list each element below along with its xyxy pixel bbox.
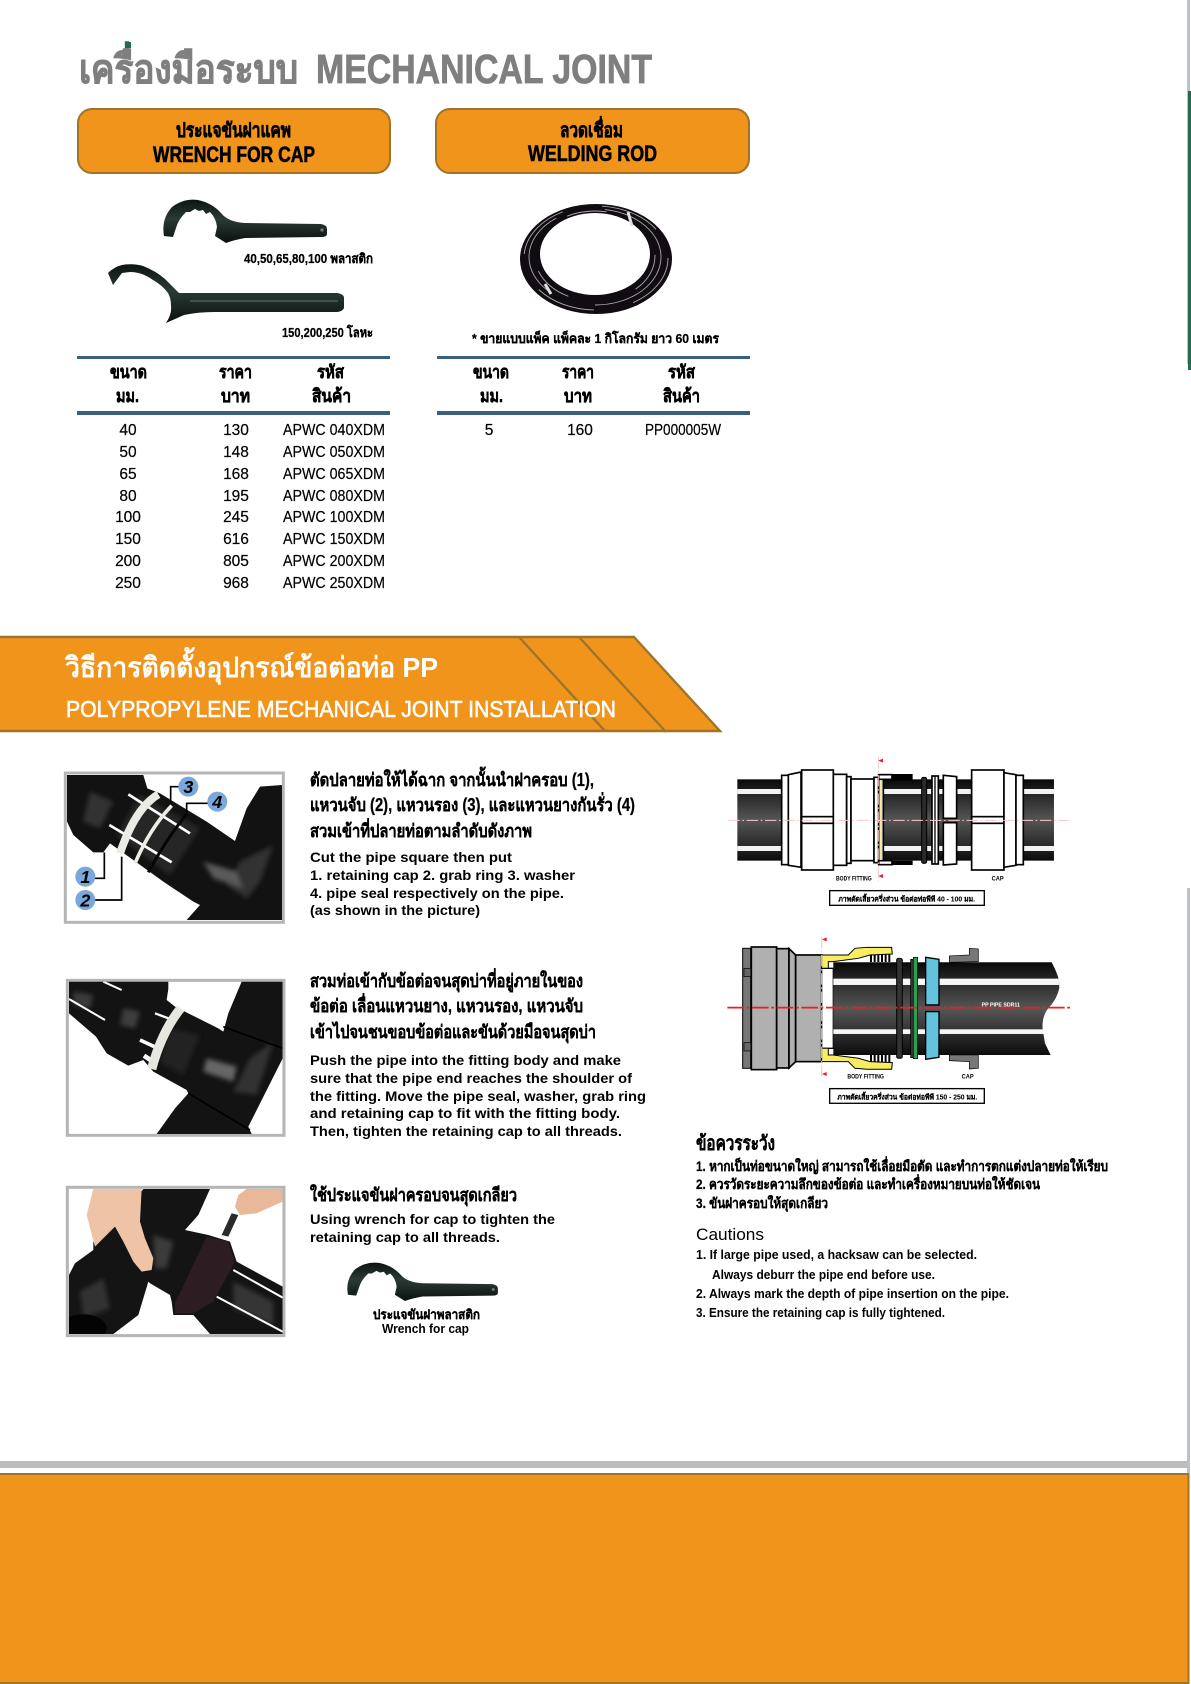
text: step 1: แหวนจับ (2), แหวนรอง (3), และแหวนยางกันรั่ว (4): [310, 792, 635, 815]
section banner: installation: วิธีการติดตั้งอุปกรณ์ข้อต่อท่อ PP: [64, 646, 438, 685]
text: precautions: ข้อควรระวัง: [696, 1132, 775, 1155]
icon: welding rod coil: [520, 204, 672, 314]
footer orange panel: [0, 1474, 1188, 1683]
table: wrench prices: รหัส: [317, 362, 345, 382]
panel heading: wrench for cap: [78, 109, 390, 173]
text: precautions: 3. ขันฝาครอบให้สุดเกลียว: [696, 1194, 828, 1212]
panel heading: welding rod: [436, 109, 749, 173]
table: wrench prices: APWC 040XDM: [283, 422, 385, 439]
table: welding rod price: ขนาด: [473, 362, 509, 382]
text: precautions: Always deburr the pipe end before use.: [712, 1267, 935, 1282]
table: wrench prices: 65: [119, 466, 137, 483]
text: precautions: 2. Always mark the depth of pipe insertion on the pipe.: [696, 1286, 1009, 1301]
callout lines and number badges: 4: [211, 792, 222, 812]
diagram: section view 40-100 mm: [728, 757, 1069, 905]
text: precautions: 1. If large pipe used, a hacksaw can be selected.: [696, 1247, 977, 1262]
caption: large size section: [830, 1089, 984, 1103]
table: wrench prices: APWC 050XDM: [283, 444, 385, 461]
text: step 1: [310, 766, 635, 918]
panel heading: wrench for cap: WRENCH FOR CAP: [153, 142, 315, 167]
label: metal wrench sizes: 150,200,250 โลหะ: [282, 324, 373, 340]
table: wrench prices: [77, 356, 390, 592]
photo: step 1 parts on pipe: [65, 773, 283, 922]
icon: metal wrench: [108, 264, 344, 323]
text: precautions: 2. ควรวัดระยะความลึกของข้อต่อ และทำเครื่องหมายบนท่อให้ชัดเจน: [696, 1174, 1040, 1192]
diagram: section view 150-250 mm: CAP: [962, 1075, 974, 1081]
callout lines and number badges: 2: [79, 890, 90, 910]
text: step 3: Using wrench for cap to tighten the: [310, 1212, 556, 1227]
text: precautions: 1. หากเป็นท่อขนาดใหญ่ สามารถใช้เลื่อยมือตัด และทำการตกแต่งปลายท่อให้เรียบ: [696, 1156, 1108, 1175]
photo: step 2 pipe pushed into fitting: [67, 980, 284, 1135]
table: wrench prices: มม.: [116, 386, 139, 406]
caption: small size section: ภาพตัดเสี้ยวครึ่งส่วน ข้อต่อท่อพีพี 40 - 100 มม.: [838, 892, 975, 903]
section banner: installation: [0, 637, 720, 732]
text: step 2: Then, tighten the retaining cap to all threads.: [310, 1124, 622, 1139]
text: step 2: เข้าไปจนชนขอบข้อต่อและขันด้วยมือจนสุดบ่า: [310, 1021, 596, 1044]
table: wrench prices: APWC 200XDM: [283, 553, 385, 570]
table: welding rod price: ราคา: [562, 362, 594, 382]
caption: small wrench: [373, 1307, 480, 1336]
text: step 1: ตัดปลายท่อให้ได้ฉาก จากนั้นนำฝาครอบ (1),: [310, 766, 594, 790]
table: wrench prices: 968: [223, 575, 249, 592]
title: เครื่องมือระบบ: [79, 41, 298, 92]
table: wrench prices: 805: [223, 553, 249, 570]
table: wrench prices: 195: [223, 488, 249, 505]
table: welding rod price: สินค้า: [663, 386, 700, 406]
panel heading: welding rod: ลวดเชื่อม: [560, 115, 623, 142]
caption: large size section: ภาพตัดเสี้ยวครึ่งส่วน ข้อต่อท่อพีพี 150 - 250 มม.: [837, 1090, 977, 1101]
panel heading: wrench for cap: ประแจขันฝาแคพ: [176, 120, 291, 142]
note: welding rod packaging: * ขายแบบแพ็ค แพ็คละ 1 กิโลกรัม ยาว 60 เมตร: [472, 329, 719, 346]
photo: step 3 tightening with wrench: [60, 1187, 284, 1342]
table: welding rod price: 5: [485, 422, 493, 439]
right edge strips: [1187, 0, 1191, 1473]
text: step 2: sure that the pipe end reaches the shoulder of: [310, 1071, 633, 1086]
text: step 3: [310, 1184, 556, 1245]
callout lines and number badges: [75, 777, 227, 910]
panel heading: welding rod: WELDING ROD: [528, 141, 657, 166]
text: precautions: [696, 1132, 1108, 1320]
text: step 2: and retaining cap to fit with the fitting body.: [310, 1106, 620, 1121]
table: wrench prices: 80: [119, 488, 137, 505]
diagram: section view 40-100 mm: CAP: [992, 877, 1004, 883]
footer divider: [0, 1461, 1188, 1468]
table: wrench prices: 200: [115, 553, 141, 570]
table: wrench prices: APWC 250XDM: [283, 575, 385, 592]
callout lines and number badges: 3: [183, 777, 193, 797]
table: welding rod price: บาท: [564, 386, 592, 406]
text: step 1: 4. pipe seal respectively on the pipe.: [310, 886, 564, 901]
text: step 1: 1. retaining cap 2. grab ring 3. washer: [310, 868, 576, 883]
text: step 2: [310, 968, 646, 1139]
table: wrench prices: 130: [223, 422, 249, 439]
table: wrench prices: APWC 150XDM: [283, 531, 385, 548]
table: wrench prices: APWC 100XDM: [283, 509, 385, 526]
icon: plastic wrench: [163, 200, 327, 243]
text: step 2: Push the pipe into the fitting body and make: [310, 1053, 622, 1068]
text: step 1: Cut the pipe square then put: [310, 850, 513, 865]
table: wrench prices: 168: [223, 466, 249, 483]
caption: small wrench: ประแจขันฝาพลาสติก: [373, 1307, 480, 1322]
table: welding rod price: 160: [567, 422, 593, 439]
callout lines and number badges: 1: [80, 867, 90, 887]
table: wrench prices: APWC 065XDM: [283, 466, 385, 483]
table: wrench prices: บาท: [221, 386, 250, 406]
table: wrench prices: 245: [223, 509, 249, 526]
table: wrench prices: ขนาด: [110, 362, 147, 382]
table: wrench prices: APWC 080XDM: [283, 488, 385, 505]
text: precautions: 3. Ensure the retaining cap is fully tightened.: [696, 1305, 945, 1320]
table: welding rod price: PP000005W: [645, 422, 721, 439]
table: wrench prices: 616: [223, 531, 249, 548]
icon: small plastic wrench: [347, 1263, 498, 1301]
table: wrench prices: ราคา: [219, 362, 252, 382]
table: wrench prices: 40: [119, 422, 137, 439]
label: plastic wrench sizes: 40,50,65,80,100 พลาสติก: [244, 251, 373, 266]
table: wrench prices: 148: [223, 444, 249, 461]
diagram: section view 150-250 mm: [727, 937, 1070, 1103]
table: wrench prices: 150: [115, 531, 141, 548]
table: welding rod price: มม.: [480, 386, 503, 406]
text: step 1: สวมเข้าที่ปลายท่อตามลำดับดังภาพ: [310, 818, 532, 841]
title: [79, 41, 652, 92]
table: wrench prices: 250: [115, 575, 141, 592]
title: MECHANICAL JOINT: [316, 46, 652, 92]
table: wrench prices: 100: [115, 509, 141, 526]
text: step 2: ข้อต่อ เลื่อนแหวนยาง, แหวนรอง, แหวนจับ: [310, 993, 583, 1016]
caption: small wrench: Wrench for cap: [382, 1321, 469, 1336]
text: step 3: ใช้ประแจขันฝาครอบจนสุดเกลียว: [310, 1184, 517, 1207]
text: step 1: (as shown in the picture): [310, 903, 480, 918]
table: welding rod price: [437, 356, 750, 439]
section banner: installation: POLYPROPYLENE MECHANICAL JOINT INSTALLATION: [66, 696, 616, 722]
text: step 2: the fitting. Move the pipe seal, washer, grab ring: [310, 1089, 646, 1104]
text: step 2: สวมท่อเข้ากับข้อต่อจนสุดบ่าที่อยู่ภายในของ: [310, 968, 583, 993]
diagram: section view 150-250 mm: PP PIPE SDR11: [982, 1003, 1020, 1009]
table: welding rod price: รหัส: [668, 362, 696, 382]
caption: small size section: [830, 891, 984, 905]
diagram: section view 150-250 mm: BODY FITTING: [847, 1075, 884, 1081]
text: step 3: retaining cap to all threads.: [310, 1230, 500, 1245]
table: wrench prices: 50: [119, 444, 137, 461]
diagram: section view 40-100 mm: BODY FITTING: [836, 877, 872, 883]
text: precautions: Cautions: [696, 1225, 764, 1244]
table: wrench prices: สินค้า: [312, 386, 351, 406]
